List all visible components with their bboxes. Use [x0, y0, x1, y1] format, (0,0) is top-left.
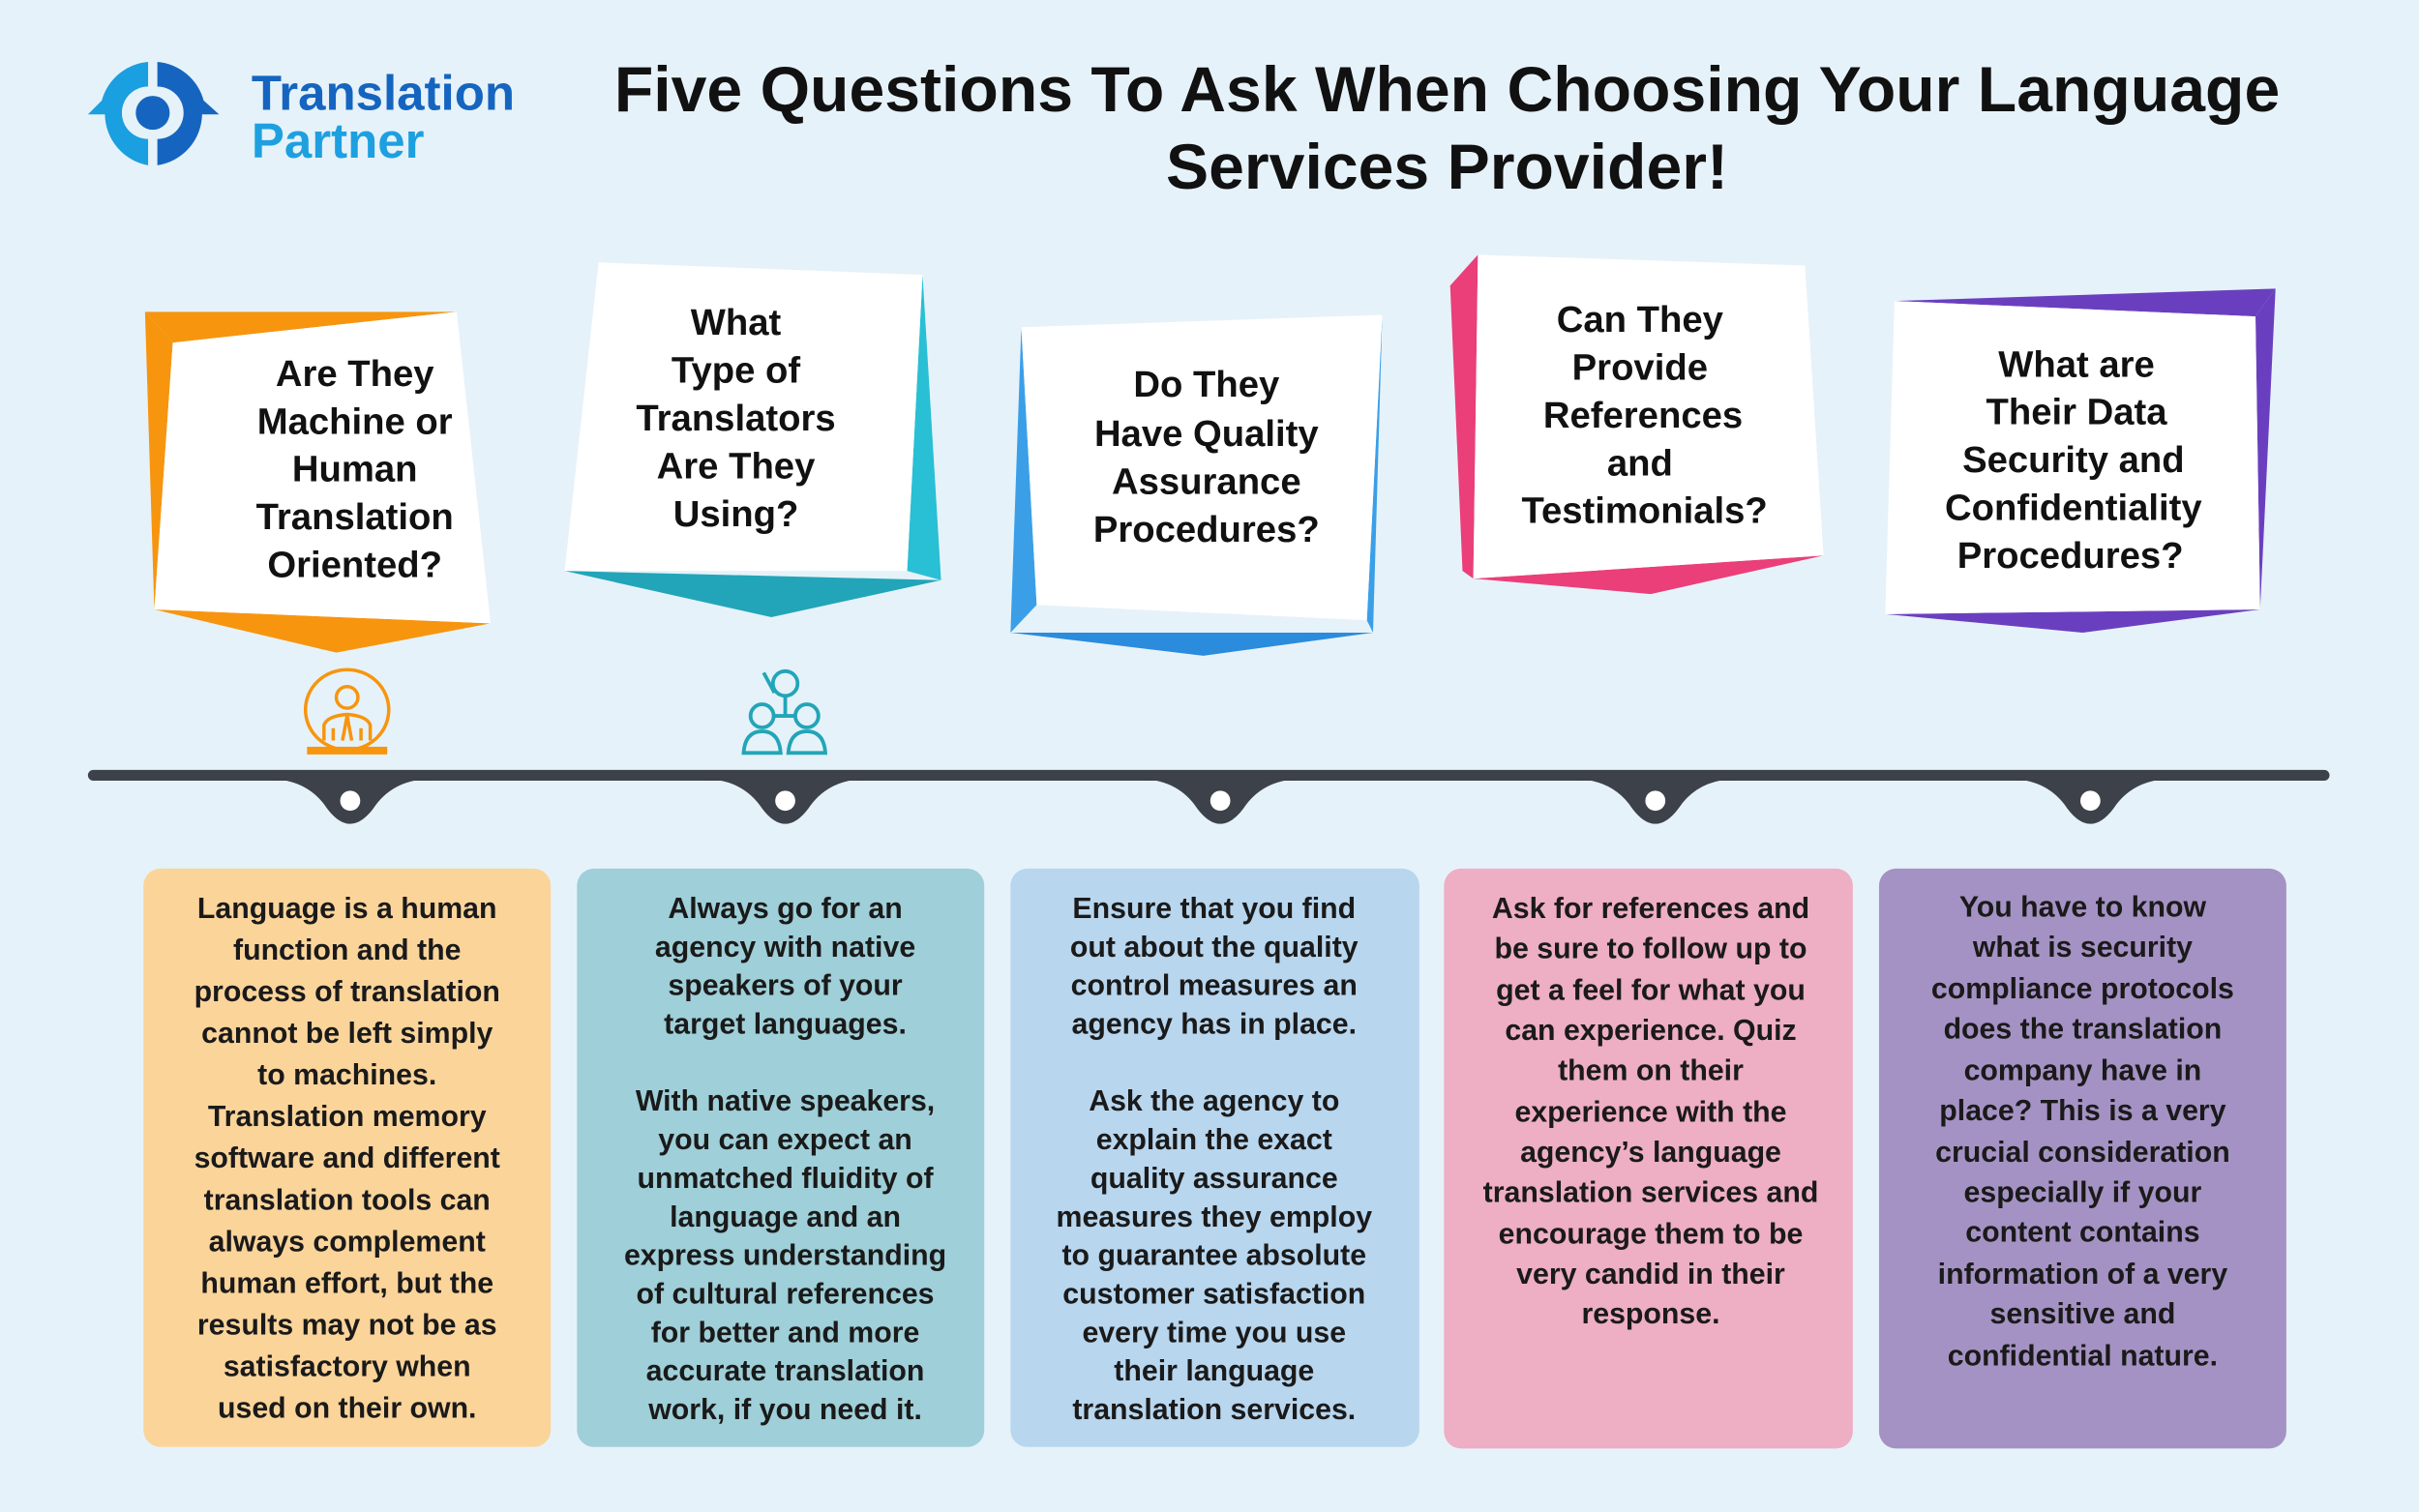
question 3 text: Do They [1133, 364, 1280, 405]
panel: answer 2: you can expect an [658, 1124, 912, 1156]
panel: answer 3: Ensure that you find [1072, 893, 1356, 925]
question 2 text [636, 302, 836, 535]
panel: answer 1: to machines. [257, 1059, 436, 1091]
panel: answer 4 [1444, 869, 1853, 1448]
question 2 text: Are They [657, 446, 816, 488]
timeline node 5 [2014, 779, 2167, 824]
panel: answer 2: With native speakers, [636, 1085, 935, 1117]
question 2 text: What [691, 302, 782, 343]
question 1 text [256, 353, 454, 586]
panel: answer 4: experience with the [1514, 1096, 1787, 1128]
panel: answer 2: of cultural references [637, 1279, 935, 1311]
panel: answer 3: customer satisfaction [1062, 1279, 1365, 1311]
question 1 text: Human [292, 449, 418, 490]
panel: answer 5: crucial consideration [1935, 1137, 2230, 1169]
question card 1 [145, 311, 491, 653]
panel: answer 3: their language [1114, 1355, 1314, 1387]
panel: answer 2: accurate translation [646, 1355, 924, 1387]
panel: answer 4: translation services and [1483, 1176, 1818, 1208]
question 2 text: Using? [673, 493, 798, 535]
question 4 text: and [1607, 442, 1673, 484]
panel: answer 1: Language is a human [197, 893, 497, 925]
panel: answer 3: agency has in place. [1072, 1008, 1357, 1040]
panel: answer 5 [1879, 869, 2286, 1448]
logo text [252, 65, 515, 168]
panel: answer 2: Always go for an [668, 893, 903, 925]
question 2 text: Translators [636, 398, 836, 439]
panel: answer 4: get a feel for what you [1496, 974, 1806, 1006]
logo text: Translation [252, 65, 515, 120]
question card 3 [1010, 315, 1383, 656]
question 3 text: Have Quality [1094, 413, 1319, 455]
panel: answer 2: for better and more [651, 1317, 919, 1349]
panel: answer 5: company have in [1964, 1054, 2201, 1086]
question 1 text: Are They [276, 353, 434, 395]
question card 2 [565, 262, 941, 617]
question 5 text: Confidentiality [1945, 488, 2202, 529]
timeline node 3 [1143, 779, 1298, 824]
panel: answer 4: response. [1581, 1298, 1720, 1330]
panel: answer 4: be sure to follow up to [1495, 933, 1807, 964]
question 5 text: Procedures? [1957, 535, 2184, 577]
question 4 text: References [1543, 395, 1743, 436]
panel: answer 2: speakers of your [668, 970, 903, 1002]
question 1 text: Translation [256, 496, 454, 538]
question 3 text: Assurance [1112, 460, 1301, 502]
panel: answer 4: agency’s language [1520, 1137, 1781, 1169]
question 5 text: What are [1998, 343, 2155, 385]
panel: answer 3: quality assurance [1090, 1163, 1338, 1195]
panel: answer 1: satisfactory when [224, 1350, 471, 1382]
icon: interpreter person [306, 669, 389, 755]
panel: answer 3 [1010, 869, 1419, 1447]
title: Five Questions To Ask When Choosing Your Language [614, 54, 2280, 126]
panel: answer 1: function and the [233, 934, 461, 966]
panel: answer 5: confidential nature. [1948, 1340, 2218, 1372]
panel: answer 5: You have to know [1959, 891, 2206, 923]
panel: answer 2: language and an [670, 1201, 901, 1233]
panel: answer 2 [577, 869, 984, 1447]
panel: answer 2: agency with native [655, 932, 915, 964]
question 5 text: Security and [1962, 439, 2185, 481]
panel: answer 5: sensitive and [1989, 1298, 2175, 1330]
question 3 text [1093, 364, 1320, 550]
title [614, 54, 2280, 203]
panel: answer 1: Translation memory [208, 1101, 487, 1133]
question 4 text: Provide [1572, 346, 1708, 388]
panel: answer 4: encourage them to be [1499, 1218, 1803, 1250]
panel: answer 3: every time you use [1082, 1317, 1346, 1349]
panel: answer 3: control measures an [1071, 970, 1358, 1002]
panel: answer 5: especially if your [1964, 1176, 2201, 1208]
panel: answer 2: work, if you need it. [647, 1394, 922, 1426]
icon: team of translators [743, 671, 825, 753]
panel: answer 5: content contains [1965, 1217, 2200, 1249]
panel: answer 1: cannot be left simply [201, 1018, 493, 1050]
timeline [88, 770, 2330, 824]
panel: answer 1: always complement [209, 1226, 486, 1258]
question 4 text: Can They [1557, 299, 1724, 341]
panel: answer 1: software and different [194, 1142, 500, 1174]
question 1 text: Machine or [257, 400, 453, 442]
panel: answer 3: measures they employ [1057, 1201, 1372, 1233]
panel: answer 1 [143, 869, 551, 1447]
panel: answer 3: out about the quality [1070, 932, 1359, 964]
panel: answer 3: Ask the agency to [1089, 1085, 1339, 1117]
panel: answer 2: unmatched fluidity of [637, 1163, 935, 1195]
timeline node 4 [1578, 779, 1732, 824]
panel: answer 5: does the translation [1944, 1013, 2222, 1045]
panel: answer 1: used on their own. [218, 1392, 476, 1424]
panel: answer 1: results may not be as [197, 1309, 497, 1341]
timeline node 1 [273, 779, 428, 824]
panel: answer 5: place? This is a very [1939, 1095, 2226, 1127]
question 4 text [1521, 299, 1768, 532]
timeline node 2 [708, 779, 862, 824]
panel: answer 5: compliance protocols [1931, 973, 2234, 1005]
panel: answer 2: express understanding [624, 1240, 946, 1272]
question 2 text: Type of [672, 350, 800, 392]
question 4 text: Testimonials? [1521, 490, 1768, 532]
panel: answer 4: Ask for references and [1492, 893, 1809, 925]
question 1 text: Oriented? [267, 545, 442, 586]
panel: answer 3: translation services. [1072, 1394, 1356, 1426]
question 3 text: Procedures? [1093, 509, 1320, 550]
panel: answer 1: translation tools can [204, 1184, 491, 1216]
panel: answer 4: can experience. Quiz [1505, 1015, 1797, 1047]
logo text: Partner [252, 113, 425, 168]
panel: answer 1: human effort, but the [200, 1267, 493, 1299]
title: Services Provider! [1166, 132, 1728, 203]
panel: answer 2: target languages. [664, 1008, 907, 1040]
panel: answer 1: process of translation [194, 976, 500, 1008]
panel: answer 4: very candid in their [1516, 1259, 1785, 1290]
logo [88, 62, 515, 168]
panel: answer 3: explain the exact [1096, 1124, 1332, 1156]
panel: answer 3: to guarantee absolute [1061, 1240, 1366, 1272]
panel: answer 5: what is security [1972, 932, 2193, 964]
panel: answer 4: them on their [1558, 1054, 1744, 1086]
question card 5 [1885, 288, 2276, 633]
icon: logo mark [88, 62, 219, 165]
question 5 text: Their Data [1986, 392, 2167, 433]
question 5 text [1945, 343, 2202, 577]
question card 4 [1450, 254, 1824, 594]
panel: answer 5: information of a very [1938, 1259, 2227, 1290]
